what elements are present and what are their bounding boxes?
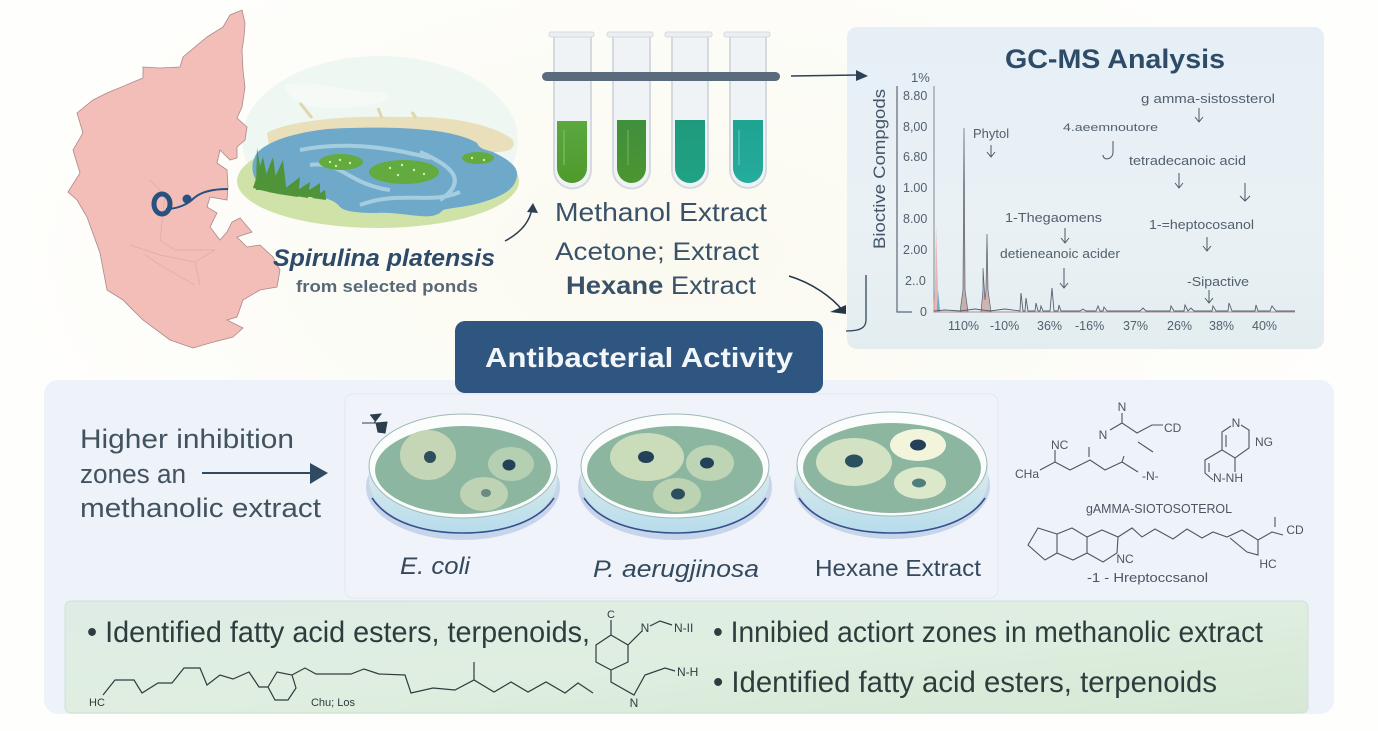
compound labels: g amma-sistossterol bbox=[1141, 92, 1275, 106]
heading banner: Antibacterial Activity: Antibacterial Activity bbox=[485, 342, 793, 373]
panel: findings: N-II bbox=[674, 621, 693, 635]
molecule labels: -N- bbox=[1142, 469, 1159, 483]
extract labels: Hexane Extract bbox=[566, 272, 756, 300]
intro text with arrow: zones an bbox=[80, 459, 186, 489]
panel: GC-MS analysis bbox=[846, 27, 1324, 349]
dish labels: E. coli bbox=[400, 553, 471, 580]
molecule 2 bbox=[1205, 425, 1249, 480]
extract labels: Acetone; Extract bbox=[555, 238, 759, 266]
arrow: pond to extracts bbox=[505, 203, 538, 241]
dish: E. coli bbox=[366, 414, 560, 540]
dish: P. aeruginosa bbox=[578, 414, 772, 540]
panel: antibacterial activity bbox=[44, 380, 1334, 714]
molecule labels: HC bbox=[1259, 557, 1277, 571]
compound labels bbox=[973, 92, 1275, 289]
map of Karnataka with location marker bbox=[68, 10, 280, 348]
panel: findings: C bbox=[607, 609, 615, 621]
panel: findings: N bbox=[641, 621, 649, 635]
tube 3 bbox=[665, 32, 712, 188]
panel: findings: N-H bbox=[677, 665, 698, 679]
axes bbox=[897, 86, 912, 312]
panel: findings: Chu; Los bbox=[311, 697, 356, 709]
molecule labels: CHa bbox=[1015, 467, 1039, 481]
compound labels: tetradecanoic acid bbox=[1129, 154, 1246, 168]
extract labels: Methanol Extract bbox=[555, 197, 768, 227]
molecule labels: N bbox=[1099, 428, 1107, 442]
dish labels: P. aerugjinosa bbox=[593, 556, 759, 583]
panel: petri dishes bbox=[345, 394, 998, 598]
x labels: 40% bbox=[1252, 319, 1277, 333]
dish: hexane extract bbox=[794, 412, 990, 539]
molecule labels: NG bbox=[1255, 435, 1273, 449]
pond backdrop haze bbox=[242, 56, 518, 224]
caption: Spirulina platensis: from selected ponds bbox=[296, 277, 478, 296]
y ticks: 1.00 bbox=[903, 181, 927, 195]
compound labels: 4.aeemnoutore bbox=[1063, 122, 1158, 134]
intro text with arrow: methanolic extract bbox=[80, 493, 322, 523]
tube 4 bbox=[724, 32, 770, 188]
bullet text: left: • Identified fatty acid esters, terpenoids, bbox=[87, 616, 590, 649]
reeds bbox=[253, 148, 326, 200]
y ticks bbox=[903, 70, 930, 319]
intro text with arrow: Higher inhibition bbox=[80, 424, 294, 454]
compound labels: 1-=heptocosanol bbox=[1149, 218, 1254, 232]
y ticks: 2.00 bbox=[903, 243, 927, 257]
spirulina mats bbox=[319, 152, 494, 184]
molecule labels: CD bbox=[1164, 421, 1182, 435]
elbow connector bbox=[846, 275, 866, 331]
molecule labels: -1 - Hreptoccsanol bbox=[1087, 570, 1208, 585]
panel: findings: N bbox=[630, 696, 638, 710]
x labels: 36% bbox=[1037, 319, 1062, 333]
chart: chromatogram bbox=[870, 70, 1295, 333]
y ticks: 8,00 bbox=[903, 120, 927, 134]
bullet text: right bottom: • Identified fatty acid esters, terpenoids bbox=[713, 666, 1217, 699]
intro text with arrow bbox=[80, 424, 328, 523]
x labels bbox=[948, 319, 1277, 333]
heading: GC-MS Analysis: GC-MS Analysis bbox=[1005, 44, 1225, 74]
x labels: -16% bbox=[1075, 319, 1104, 333]
compound labels: -Sipactive bbox=[1187, 275, 1249, 289]
panel: findings: HC bbox=[89, 697, 105, 709]
molecule chain bbox=[103, 620, 675, 700]
y ticks: 0 bbox=[920, 305, 927, 319]
y axis title: Bioctive Compgods bbox=[870, 89, 889, 249]
caption: Spirulina platensis bbox=[273, 245, 495, 296]
caption: Spirulina platensis: Spirulina platensis bbox=[273, 245, 495, 272]
compound labels: 1-Thegaomens bbox=[1005, 211, 1102, 225]
y ticks: 1% bbox=[911, 70, 930, 85]
tube 2 bbox=[607, 32, 653, 188]
arrow: extracts to GC-MS bbox=[789, 276, 846, 314]
x labels: 37% bbox=[1123, 319, 1148, 333]
illustration: pond with spirulina mats bbox=[237, 103, 519, 228]
x labels: 26% bbox=[1167, 319, 1192, 333]
molecules: structural diagrams bbox=[1015, 400, 1304, 585]
y ticks: 6.80 bbox=[903, 150, 927, 164]
molecule labels: N bbox=[1118, 400, 1126, 414]
molecule labels bbox=[1015, 400, 1304, 585]
molecule labels: N bbox=[1232, 416, 1240, 430]
molecule labels: N-NH bbox=[1213, 471, 1243, 485]
molecule labels: NC bbox=[1116, 552, 1134, 566]
heading banner: Antibacterial Activity bbox=[455, 321, 823, 393]
compound arrows bbox=[987, 108, 1250, 303]
molecule 1 bbox=[1040, 413, 1163, 472]
molecule 3 bbox=[1028, 517, 1283, 562]
molecule labels: gAMMA-SIOTOSOTEROL bbox=[1086, 501, 1232, 516]
x labels: -10% bbox=[990, 319, 1019, 333]
test tubes bbox=[542, 32, 780, 188]
x labels: 38% bbox=[1209, 319, 1234, 333]
x labels: 110% bbox=[948, 319, 979, 333]
rack bar bbox=[542, 72, 780, 81]
arrow: tubes to GC-MS bbox=[791, 70, 868, 81]
extract labels bbox=[555, 197, 768, 300]
dish labels bbox=[400, 553, 982, 583]
y ticks: 2..0 bbox=[905, 274, 926, 288]
compound labels: detieneanoic acider bbox=[1000, 247, 1120, 261]
tube 1 bbox=[549, 32, 594, 188]
arrow bbox=[202, 472, 312, 474]
dish labels: Hexane Extract bbox=[815, 555, 982, 581]
molecule labels: CD bbox=[1286, 523, 1304, 537]
bullet text: right top: • Innibied actiort zones in methanolic extract bbox=[713, 616, 1264, 649]
peaks bbox=[933, 225, 940, 312]
compound labels: Phytol bbox=[973, 126, 1009, 141]
icon: small mark bbox=[362, 414, 387, 433]
icon: location marker bbox=[154, 189, 228, 214]
panel: findings bbox=[65, 601, 1308, 713]
molecule labels: NC bbox=[1051, 438, 1069, 452]
y ticks: 8.00 bbox=[903, 212, 927, 226]
y ticks: 8.80 bbox=[903, 89, 927, 103]
